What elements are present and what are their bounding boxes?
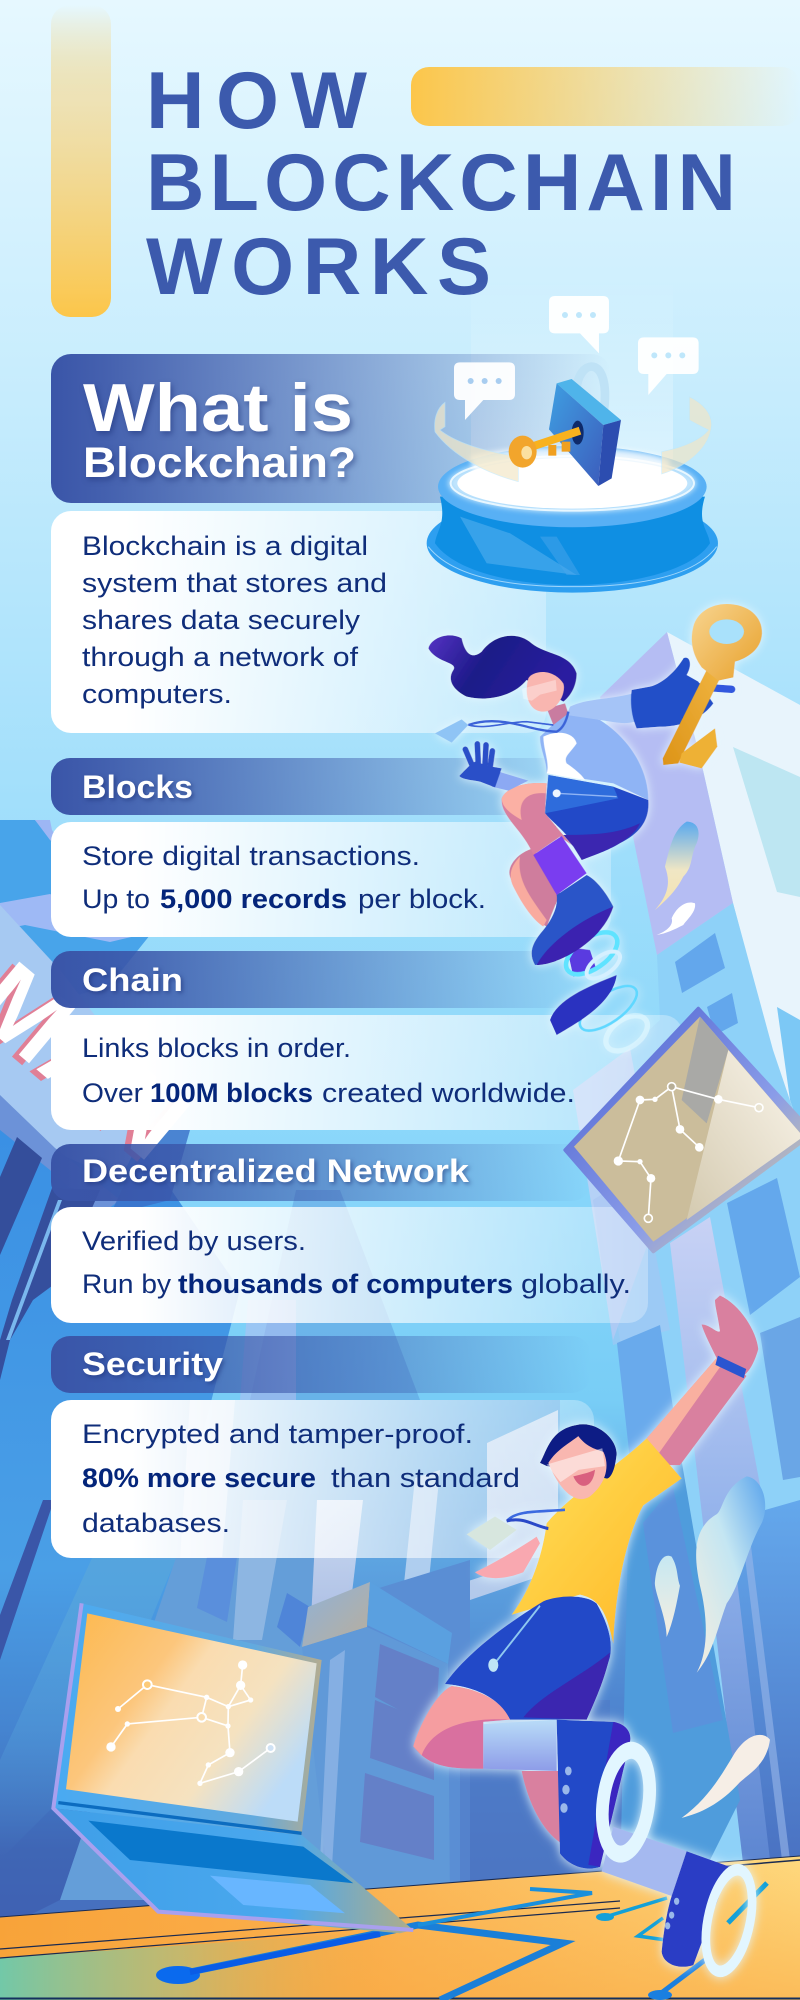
left glass ring strip <box>435 402 518 482</box>
title <box>146 56 736 312</box>
shirt <box>540 712 648 800</box>
title: HOW <box>146 56 368 146</box>
centre towers <box>60 1190 610 1900</box>
panel: blocks: Up to <box>82 884 150 914</box>
title: WORKS <box>146 222 491 312</box>
heading: What is Blockchain <box>51 354 611 503</box>
icon: speech bubble right <box>638 337 699 395</box>
ground with circuit traces <box>0 1856 800 2000</box>
lanyard and id card <box>507 1510 565 1521</box>
hair <box>540 1424 617 1479</box>
icon: padlock <box>549 367 621 486</box>
constellation <box>106 1660 275 1786</box>
lanyard <box>435 719 468 743</box>
illustration: lock on glowing platform <box>427 296 718 593</box>
title: BLOCKCHAIN <box>146 138 736 228</box>
illustration: floating wisps on wall <box>655 822 699 935</box>
heading: Blocks <box>51 758 591 815</box>
back lower leg <box>522 1771 563 1842</box>
character: woman holding key <box>428 604 762 1058</box>
heading: Decentralized Network <box>51 1144 591 1201</box>
mouth <box>573 1470 595 1486</box>
icon: speech bubble top <box>549 296 609 353</box>
front shoe <box>557 1720 630 1869</box>
panel: decentralized network: Verified by users. <box>82 1226 306 1256</box>
pocket <box>545 775 618 813</box>
big key <box>663 604 762 768</box>
panel: chain: Over <box>82 1078 143 1108</box>
ring on front shoe <box>596 1744 656 1860</box>
face <box>527 672 564 712</box>
sock <box>483 1720 557 1771</box>
thigh <box>413 1686 510 1769</box>
left buildings <box>0 820 240 1930</box>
illustration: floating wisps near man <box>655 1476 770 1818</box>
panel: decentralized network <box>51 1207 648 1323</box>
heading: Blocks: Blocks <box>82 769 193 805</box>
panel: what is blockchain text: shares data securely <box>82 605 361 635</box>
panel: what is blockchain text <box>51 511 546 733</box>
heading: Chain: Chain <box>82 962 183 998</box>
title decorative bars <box>51 5 800 317</box>
panel: blocks <box>51 822 611 937</box>
panel: decentralized network: thousands of computers <box>178 1269 513 1299</box>
panel: security: databases. <box>82 1508 230 1538</box>
glove right <box>631 658 713 728</box>
character: man in yellow shirt <box>413 1296 761 1979</box>
goggles <box>548 1450 604 1481</box>
panel: blocks: per block. <box>358 884 486 914</box>
heading: Security <box>51 1336 591 1393</box>
heading: Chain <box>51 951 591 1008</box>
panel: blocks: Store digital transactions. <box>82 841 420 871</box>
heading: Decentralized Network: Decentralized Network <box>82 1153 469 1189</box>
panel: security: 80% more secure <box>82 1463 316 1493</box>
panel: what is blockchain text: Blockchain is a digital <box>82 531 368 561</box>
panel: chain: created worldwide. <box>322 1078 575 1108</box>
panel: blocks: 5,000 records <box>160 884 347 914</box>
panel: what is blockchain text: computers. <box>82 679 232 709</box>
icon: speech bubble left <box>454 362 515 420</box>
panel: security: than standard <box>331 1463 520 1493</box>
shirt <box>512 1438 682 1644</box>
illustration: laptop <box>53 1603 413 1933</box>
raised arm <box>647 1358 747 1465</box>
panel: chain: 100M blocks <box>150 1078 313 1108</box>
panel: decentralized network: globally. <box>521 1269 631 1299</box>
background cityscape <box>0 632 800 2000</box>
face <box>548 1436 607 1499</box>
platform <box>427 446 718 593</box>
shorts <box>545 775 648 860</box>
heading: Security: Security <box>82 1346 223 1382</box>
small arm <box>475 1537 540 1578</box>
glow column behind platform <box>471 280 673 490</box>
upper thigh <box>502 783 572 855</box>
heading: What is Blockchain: What is <box>83 370 353 446</box>
wand <box>673 685 732 689</box>
sock <box>533 836 587 895</box>
glove left <box>459 744 502 787</box>
panel: chain: Links blocks in order. <box>82 1033 351 1063</box>
lower leg <box>509 848 560 927</box>
hover rings <box>573 978 654 1058</box>
panel: what is blockchain text: system that stores and <box>82 568 387 598</box>
illustration: floating tablet <box>565 1008 800 1252</box>
upper boot <box>532 875 613 965</box>
panel: what is blockchain text: through a network of <box>82 642 359 672</box>
panel: chain <box>51 1015 683 1130</box>
hair <box>428 635 577 702</box>
arm left <box>492 770 528 791</box>
panel: decentralized network: Run by <box>82 1269 172 1299</box>
shorts <box>445 1597 611 1720</box>
neck <box>547 703 568 725</box>
right glass ring strip <box>662 397 712 474</box>
rear sock and shoe <box>602 1827 687 1896</box>
heading: What is Blockchain: Blockchain? <box>83 439 356 487</box>
right building <box>573 632 800 1900</box>
panel: security <box>51 1400 594 1558</box>
constellation <box>614 1083 763 1222</box>
panel: security: Encrypted and tamper-proof. <box>82 1419 473 1449</box>
lower boot <box>550 975 617 1035</box>
icon: key in lock <box>509 431 580 468</box>
